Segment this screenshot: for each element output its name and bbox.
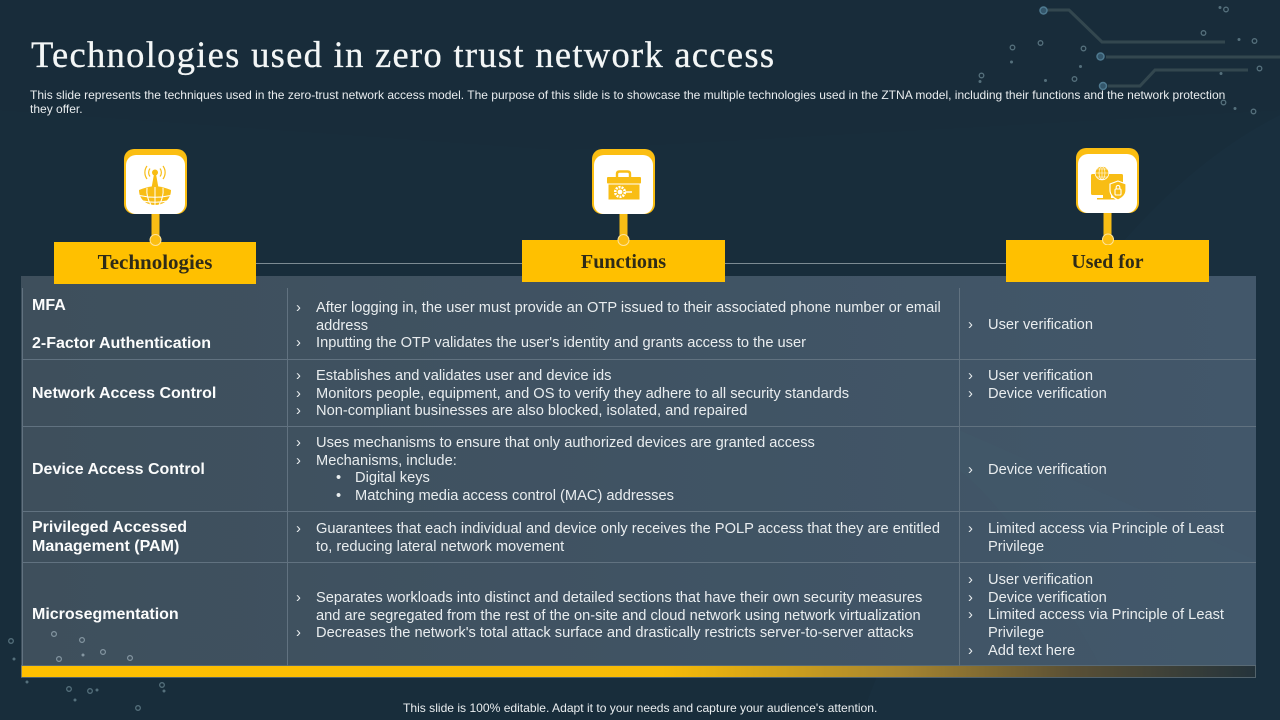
technology labels bbox=[32, 297, 211, 352]
heading: Used for: Used for bbox=[1072, 251, 1143, 273]
used for text: Device verification bbox=[988, 462, 1107, 478]
function text: › bbox=[296, 386, 301, 402]
function text: Non-compliant businesses are also blocked, isolated, and repaired bbox=[316, 403, 747, 419]
technology label: Device Access Control bbox=[32, 461, 205, 478]
function text: Digital keys bbox=[355, 470, 430, 486]
function text: Separates workloads into distinct and detailed sections that have their own security measures bbox=[316, 590, 922, 606]
function text: • bbox=[336, 488, 341, 504]
heading: Used for bbox=[1006, 240, 1209, 282]
technology labels: MFA bbox=[32, 297, 66, 314]
function text: › bbox=[296, 453, 301, 469]
function text: Matching media access control (MAC) addresses bbox=[355, 488, 674, 504]
function text: › bbox=[296, 435, 301, 451]
function text: address bbox=[316, 318, 368, 334]
technology label: Management (PAM) bbox=[32, 538, 179, 555]
subtitle description: This slide represents the techniques used in the zero-trust network access model. The purpose of this slide is to showcase the multiple technologies used in the ZTNA model, including their functions and the network protection bbox=[30, 88, 1225, 102]
icon: functions toolbox bbox=[592, 149, 655, 246]
used for text: Limited access via Principle of Least bbox=[988, 521, 1224, 537]
icon: technologies antenna globe bbox=[124, 149, 187, 246]
used for text: Privilege bbox=[988, 539, 1044, 555]
used for text: Device verification bbox=[988, 590, 1107, 606]
subtitle description: they offer. bbox=[30, 102, 83, 116]
used for text: Limited access via Principle of Least bbox=[988, 607, 1224, 623]
function text: › bbox=[296, 403, 301, 419]
used for text: › bbox=[968, 317, 973, 333]
function text: • bbox=[336, 470, 341, 486]
function text: to, reducing lateral network movement bbox=[316, 539, 564, 555]
function text bbox=[296, 435, 815, 504]
function text bbox=[296, 521, 940, 555]
heading: Technologies: Technologies bbox=[98, 250, 212, 274]
table panel bbox=[21, 276, 1256, 666]
heading: Technologies bbox=[54, 242, 256, 284]
function text: Guarantees that each individual and device only receives the POLP access that they are entitled bbox=[316, 521, 940, 537]
row 2: Network Access Control bbox=[32, 368, 1107, 419]
row 4: Privileged Accessed Management bbox=[32, 519, 1224, 555]
used for text: › bbox=[968, 643, 973, 659]
function text: › bbox=[296, 335, 301, 351]
used for text: Add text here bbox=[988, 643, 1075, 659]
technology label: Network Access Control bbox=[32, 385, 216, 402]
function text: › bbox=[296, 521, 301, 537]
function text: › bbox=[296, 300, 301, 316]
row 1: MFA and 2-Factor Authentication bbox=[32, 297, 1093, 352]
title: Technologies used in zero trust network access bbox=[31, 34, 775, 75]
row 5: Microsegmentation bbox=[32, 572, 1224, 659]
heading: Functions: Functions bbox=[581, 251, 666, 273]
used for text: › bbox=[968, 590, 973, 606]
function text: and are segregated from the rest of the on-site and cloud network using network virtualization bbox=[316, 608, 921, 624]
used for text: User verification bbox=[988, 572, 1093, 588]
technology labels: 2-Factor Authentication bbox=[32, 335, 211, 352]
technology label bbox=[32, 519, 187, 555]
used for text: › bbox=[968, 462, 973, 478]
function text bbox=[296, 300, 941, 351]
function text: Establishes and validates user and device ids bbox=[316, 368, 611, 384]
function text: Decreases the network's total attack surface and drastically restricts server-to-server attacks bbox=[316, 625, 914, 641]
function text bbox=[296, 368, 849, 419]
used for text: › bbox=[968, 368, 973, 384]
function text: After logging in, the user must provide an OTP issued to their associated phone number or email bbox=[316, 300, 941, 316]
used for text bbox=[968, 368, 1107, 402]
function text: › bbox=[296, 590, 301, 606]
used for text: Privilege bbox=[988, 625, 1044, 641]
function text: › bbox=[296, 625, 301, 641]
used for text bbox=[968, 572, 1224, 659]
function text: Mechanisms, include: bbox=[316, 453, 457, 469]
function text: Inputting the OTP validates the user's identity and grants access to the user bbox=[316, 335, 806, 351]
used for text: › bbox=[968, 386, 973, 402]
used for text: User verification bbox=[988, 317, 1093, 333]
used for text: › bbox=[968, 607, 973, 623]
function text: › bbox=[296, 368, 301, 384]
heading: Functions bbox=[522, 240, 725, 282]
used for text bbox=[968, 521, 1224, 555]
subtitle description bbox=[30, 88, 1225, 116]
function text bbox=[296, 590, 922, 641]
row 3: Device Access Control bbox=[32, 435, 1107, 504]
technology label: Privileged Accessed bbox=[32, 519, 187, 536]
used for text: User verification bbox=[988, 368, 1093, 384]
used for text: › bbox=[968, 521, 973, 537]
icon: used for monitor shield bbox=[1076, 148, 1139, 245]
technology label: Microsegmentation bbox=[32, 606, 179, 623]
function text: Uses mechanisms to ensure that only authorized devices are granted access bbox=[316, 435, 815, 451]
gold gradient bar bbox=[21, 666, 1256, 678]
function text: Monitors people, equipment, and OS to verify they adhere to all security standards bbox=[316, 386, 849, 402]
used for text: › bbox=[968, 572, 973, 588]
used for text: Device verification bbox=[988, 386, 1107, 402]
footer note: This slide is 100% editable. Adapt it to your needs and capture your audience's attention. bbox=[403, 701, 877, 715]
